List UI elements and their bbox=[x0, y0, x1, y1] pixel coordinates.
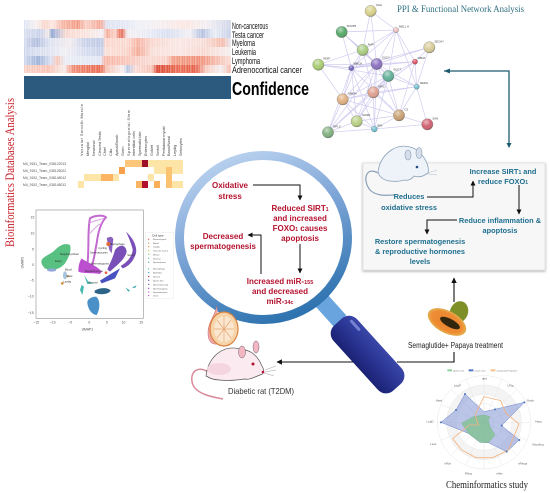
panel: treatment effects: levels bbox=[410, 257, 430, 266]
panel: treatment effects: Reduces bbox=[394, 192, 424, 201]
cell-type legend: Macrophage bbox=[153, 268, 166, 271]
cancer heatmap: Testa cancer bbox=[232, 30, 264, 40]
lens text: pathway: Decreased bbox=[203, 232, 243, 241]
protein interaction network: SUCT bbox=[393, 67, 401, 71]
title: PPI network: PPI & Functional Network Analysis bbox=[397, 5, 524, 15]
protein interaction network: SHIPA bbox=[362, 113, 370, 117]
cell-type legend: Mesenchymal bbox=[153, 239, 167, 241]
cell-type legend: Neuron bbox=[153, 276, 161, 279]
UMAP scatter plot: Spermatocytes bbox=[90, 250, 108, 254]
cell-type legend: Sperm late bbox=[153, 279, 164, 282]
UMAP scatter plot: 10 bbox=[31, 232, 35, 236]
cancer heatmap: Adrenocortical cancer bbox=[232, 65, 302, 75]
icon: white mouse bbox=[366, 146, 437, 195]
arrow: papaya to panel bbox=[453, 278, 455, 302]
cell-type legend: Mesial bbox=[153, 254, 160, 256]
lens text: pathway: spermatogenesis bbox=[190, 242, 256, 251]
UMAP scatter plot: Leydig bbox=[63, 280, 72, 284]
radar chart: Lsse bbox=[430, 442, 437, 446]
UMAP scatter plot: 10 bbox=[122, 321, 126, 325]
cell-type heatmap: Sertoli bbox=[156, 145, 160, 156]
cell-type legend: Stromal bbox=[153, 257, 161, 260]
cancer heatmap bbox=[24, 20, 309, 99]
cell-type heatmap: Spermatogonial Stem bbox=[127, 110, 131, 156]
cell-type heatmap: Vascular Smooth Muscle bbox=[80, 104, 84, 156]
cell-type heatmap: Mü_9151_Team_038126022 bbox=[23, 169, 66, 173]
cell-type legend: Spermatogonia bbox=[153, 287, 168, 290]
legend: Lower Limit bbox=[474, 369, 486, 372]
UMAP scatter plot: Mast bbox=[67, 274, 73, 278]
protein interaction network: CS bbox=[404, 107, 408, 111]
cell-type heatmap: Cilia bbox=[109, 148, 113, 156]
panel: treatment effects: & reproductive hormones bbox=[375, 247, 465, 256]
cell-type heatmap: Peritubular myoid bbox=[162, 126, 166, 156]
magnifying glass bbox=[180, 156, 409, 398]
UMAP scatter plot: Early bbox=[55, 259, 62, 263]
radar chart: LPtg bbox=[507, 383, 514, 387]
label: diabetic rat: Diabetic rat (T2DM) bbox=[228, 386, 294, 396]
panel: treatment effects: Increase SIRT1 and bbox=[470, 167, 537, 176]
protein interaction network: SUCY bbox=[382, 56, 390, 60]
cell-type legend: Blood bbox=[153, 243, 159, 245]
cell-type legend: Spermatozoa bbox=[153, 261, 167, 264]
radar chart: Mcoding bbox=[532, 442, 544, 446]
cell-type legend: Spermatid early bbox=[153, 283, 169, 286]
panel: treatment effects: Reduce inflammation & bbox=[459, 216, 542, 225]
radar chart: LogP bbox=[454, 383, 461, 387]
protein interaction network: AMP bbox=[368, 42, 374, 46]
UMAP scatter plot: Blood bbox=[65, 267, 72, 271]
cell-type heatmap: Basal/Nasal bbox=[167, 136, 171, 156]
cell-type heatmap: Goblet bbox=[150, 144, 154, 156]
cell-type legend: Epithelial bbox=[153, 272, 162, 275]
cell-type heatmap: Enterocytes bbox=[144, 136, 148, 156]
icon: diabetic rat with testis bbox=[192, 306, 276, 399]
cell-type heatmap: Sebocytes bbox=[179, 138, 183, 156]
UMAP scatter plot: 0 bbox=[88, 321, 90, 325]
UMAP scatter plot: Sertoli bbox=[127, 253, 135, 257]
lens text: pathway: Oxidative bbox=[212, 181, 249, 190]
UMAP scatter plot: Spermatogonia bbox=[91, 261, 109, 265]
radar chart: Hacc bbox=[535, 420, 543, 424]
legend: Upper Limit bbox=[453, 369, 464, 372]
cell-type legend: Spermatocytes bbox=[153, 291, 167, 294]
cell-type heatmap: Mü_9152_Team_038148012 bbox=[23, 176, 66, 180]
radar chart: Nrotb bbox=[527, 398, 534, 402]
cancer heatmap: Leukemia bbox=[232, 47, 256, 57]
cancer heatmap: Non-cancerous bbox=[232, 21, 268, 31]
protein interaction network: SAN bbox=[432, 116, 438, 120]
UMAP scatter plot: 15 bbox=[31, 216, 35, 220]
panel: treatment effects: oxidative stress bbox=[381, 203, 437, 212]
protein interaction network: MELL H bbox=[399, 25, 409, 29]
arrow: network to panel bbox=[444, 71, 509, 147]
panel: treatment effects: Restore spermatogenesis bbox=[375, 237, 465, 246]
label: cheminformatics: Cheminformatics study bbox=[446, 480, 529, 491]
legend bbox=[447, 369, 517, 372]
UMAP scatter plot: Cycling bbox=[98, 246, 108, 250]
legend: Compound Properties bbox=[496, 369, 517, 372]
cancer heatmap: Confidence bbox=[232, 79, 309, 99]
protein interaction network: REDH bbox=[420, 81, 428, 85]
UMAP scatter plot: Stromal bbox=[88, 280, 98, 284]
radar chart: fRing bbox=[465, 472, 472, 476]
green cluster bbox=[41, 244, 71, 270]
cell-type heatmap: Interstitial cells bbox=[132, 131, 136, 156]
UMAP scatter plot: 15 bbox=[139, 321, 143, 325]
cell-type heatmap: Spermatid late bbox=[138, 132, 142, 156]
UMAP scatter plot: −10 bbox=[28, 295, 34, 299]
protein interaction network: WBAT bbox=[418, 56, 426, 60]
protein interaction network: MBICK bbox=[353, 62, 362, 66]
radar chart: nRch bbox=[444, 461, 451, 465]
cell-type heatmap: Neuronal bbox=[92, 140, 96, 156]
protein interaction network: MBDH bbox=[348, 91, 357, 95]
protein interaction network: SECHY bbox=[434, 39, 444, 43]
protein interaction network: BIM bbox=[377, 124, 383, 128]
lens text: pathway: stress bbox=[218, 192, 242, 201]
cell-type legend: Cell type bbox=[152, 233, 164, 237]
UMAP scatter plot: −15 bbox=[33, 321, 39, 325]
UMAP scatter plot: −15 bbox=[28, 311, 34, 315]
arrow: treatment to rat bbox=[397, 352, 454, 362]
protein interaction network: RDIP bbox=[323, 57, 330, 61]
cell-type heatmap: Leydig bbox=[173, 145, 177, 156]
protein interaction network: SAG bbox=[376, 3, 382, 7]
panel: treatment effects bbox=[363, 146, 545, 270]
cancer heatmap: Lymphoma bbox=[232, 56, 260, 66]
cell-type heatmap: Chief bbox=[103, 146, 107, 156]
title: bioinformatics: Bioinformatics Databases Analysis bbox=[3, 98, 17, 247]
protein interaction network: MRC bbox=[378, 84, 385, 88]
radar chart: LogD bbox=[426, 420, 434, 424]
arrowhead: to panel bbox=[506, 143, 512, 148]
cell-type heatmap: Germ bbox=[121, 146, 125, 156]
lens text: pathway: Increased miR-155 bbox=[247, 277, 313, 286]
cell-type heatmap: Mü_9152_Team_038148012 bbox=[23, 183, 66, 187]
cell-type heatmap: Apical/Brush bbox=[115, 135, 119, 156]
lens text: pathway: Reduced SIRT1 bbox=[271, 204, 329, 213]
lens text: pathway: and increased bbox=[273, 214, 327, 223]
cell-type legend bbox=[146, 232, 174, 298]
lens text: pathway bbox=[190, 181, 329, 306]
panel: treatment effects: reduce FOXO1 bbox=[478, 177, 528, 186]
radar chart: qed bbox=[482, 377, 487, 381]
radar chart: nRings bbox=[518, 461, 528, 465]
UMAP scatter plot: Megakaryocyte bbox=[85, 269, 104, 273]
label: treatment: Semaglutide+ Papaya treatment bbox=[408, 341, 504, 350]
lens text: pathway: FOXO1 causes bbox=[273, 224, 328, 233]
panel: treatment effects: apoptosis bbox=[483, 226, 517, 235]
icon: papaya bbox=[423, 299, 471, 342]
UMAP scatter plot: −5 bbox=[68, 321, 72, 325]
UMAP scatter plot: 5 bbox=[106, 321, 108, 325]
lens text: pathway: miR-34c bbox=[267, 297, 293, 306]
cell-type legend: Germ bbox=[153, 295, 159, 298]
protein interaction network bbox=[313, 3, 444, 138]
lens text: pathway: apoptosis bbox=[281, 234, 319, 243]
radar chart bbox=[426, 369, 544, 476]
cell-type heatmap: Mü_9151_Team_038122013 bbox=[23, 162, 66, 166]
UMAP scatter plot: −5 bbox=[30, 279, 34, 283]
protein interaction network: RPL3 bbox=[333, 125, 341, 129]
radar chart: nHet bbox=[496, 472, 503, 476]
arrow: handle to rat bbox=[277, 361, 353, 363]
UMAP scatter plot: 5 bbox=[32, 247, 34, 251]
radar chart: Hard bbox=[436, 398, 443, 402]
arrowhead: to network bbox=[444, 68, 450, 74]
cell-type legend: Leydig bbox=[153, 247, 160, 249]
UMAP scatter plot: Megakaryoblast bbox=[60, 252, 79, 256]
UMAP scatter plot: UMAP1 bbox=[82, 328, 93, 332]
protein interaction network: SNOP5 bbox=[347, 24, 357, 28]
cancer heatmap: Myeloma bbox=[232, 38, 255, 48]
cell-type heatmap: Mesglial bbox=[86, 142, 90, 156]
lens text: pathway: and decreased bbox=[252, 287, 308, 296]
UMAP scatter plot: 0 bbox=[32, 263, 34, 267]
cell-type legend: Vascular Tissue bbox=[153, 250, 169, 253]
cell-type heatmap: Cleaved Testis bbox=[98, 131, 102, 156]
UMAP scatter plot bbox=[20, 210, 174, 332]
UMAP scatter plot: UMAP2 bbox=[20, 257, 24, 268]
UMAP scatter plot: −10 bbox=[50, 321, 56, 325]
cell-type heatmap bbox=[23, 104, 183, 188]
UMAP scatter plot: Macrophage bbox=[110, 242, 125, 246]
